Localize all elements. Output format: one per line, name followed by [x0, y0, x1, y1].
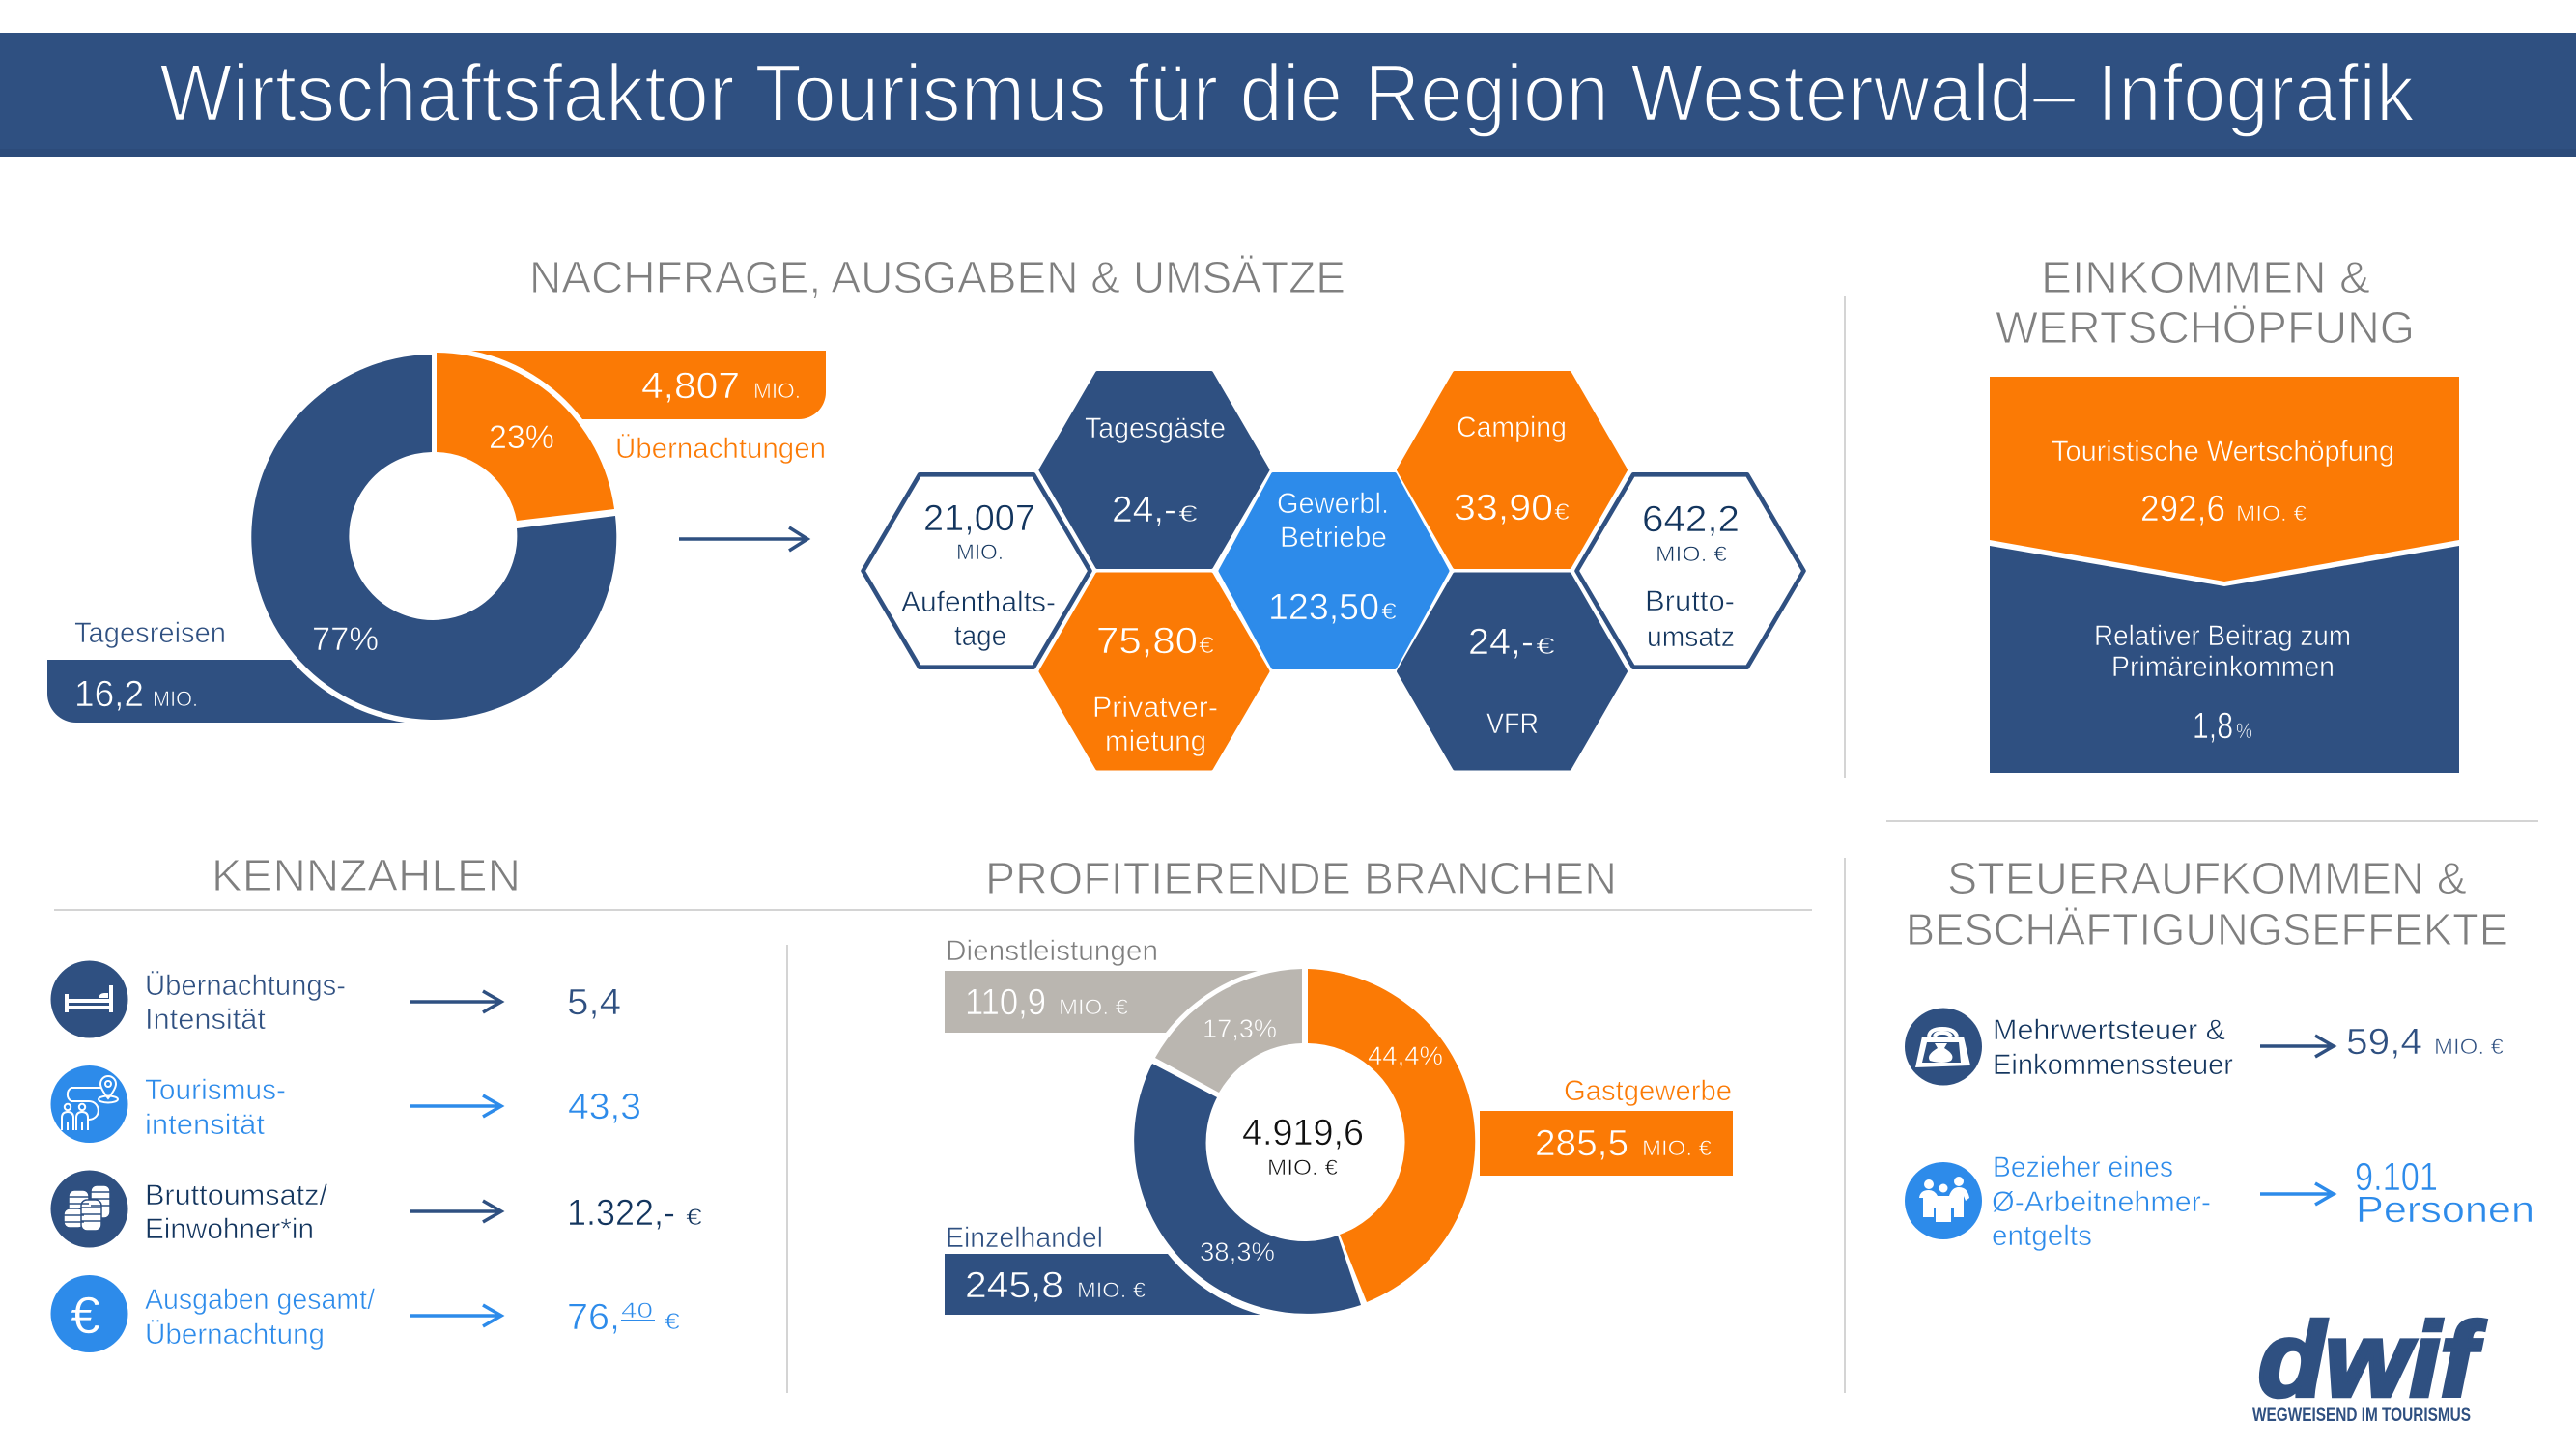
label band: Gastgewerbe — [1480, 1111, 1733, 1176]
icon: shopping bag with money sack — [1905, 1009, 1982, 1086]
label band: Übernachtungen — [471, 351, 826, 419]
block: Touristische Wertschöpfung: MIO. € — [2236, 501, 2307, 526]
row: Bezieher eines Arbeitnehmerentgelts: Ø-Arbeitnehmer- — [1992, 1186, 2211, 1218]
value: 285,5 Mio. Euro: MIO. € — [1642, 1136, 1712, 1160]
share: 44,4%: 44,4% — [1368, 1041, 1443, 1070]
title banner: Wirtschaftsfaktor Tourismus für die Region Westerwald– Infografik — [159, 47, 2416, 138]
heading: Steueraufkommen & Beschäftigungseffekte — [1906, 853, 2508, 954]
centre total: 4.919,6 Mio. Euro: MIO. € — [1267, 1155, 1338, 1179]
hexagon: VFR: € — [1536, 634, 1556, 660]
label: Tagesreisen: Tagesreisen — [74, 617, 226, 649]
logo: dwif: dwif — [2258, 1301, 2486, 1419]
row: Bruttoumsatz je Einwohner: Bruttoumsatz/ — [145, 1179, 328, 1211]
row: Bezieher eines Arbeitnehmerentgelts — [1905, 1151, 2534, 1252]
row: Bezieher eines Arbeitnehmerentgelts: Personen — [2356, 1190, 2534, 1231]
icon: euro — [50, 1275, 127, 1352]
segment: Dienstleistungen 17,3% — [1155, 969, 1302, 1093]
value: 285,5 Mio. Euro: 285,5 — [1535, 1123, 1628, 1164]
value: 4,807 Mio.: MIO. — [753, 379, 801, 403]
value: 4,807 Mio.: 4,807 — [641, 366, 740, 407]
hexagon: Privatvermietung — [1041, 574, 1267, 769]
hexagon: Aufenthaltstage — [863, 474, 1090, 668]
value: 245,8 Mio. Euro: MIO. € — [1077, 1278, 1146, 1302]
hexagon: VFR — [1399, 574, 1626, 769]
row: Ausgaben gesamt je Übernachtung — [50, 1275, 681, 1352]
hexagon: Privatvermietung: € — [1199, 633, 1215, 659]
hexagon: Gewerbliche Betriebe — [1221, 474, 1447, 668]
heading: Einkommen & Wertschöpfung: EINKOMMEN & — [2041, 252, 2370, 302]
hexagon: Bruttoumsatz — [1576, 474, 1804, 668]
hexagon: Gewerbliche Betriebe: Betriebe — [1280, 522, 1387, 554]
block: Relativer Beitrag: % — [2236, 719, 2252, 743]
icon: people and map pin — [50, 1065, 127, 1143]
block: Relativer Beitrag: 1,8 — [2193, 706, 2233, 747]
row: Mehrwertsteuer und Einkommenssteuer: Mehrwertsteuer & — [1993, 1014, 2225, 1046]
row: Bruttoumsatz je Einwohner: 1.322,- — [567, 1193, 675, 1234]
hexagon: Gewerbliche Betriebe: 123,50 — [1268, 587, 1379, 628]
row: Ausgaben gesamt je Übernachtung: 40 — [621, 1298, 653, 1322]
icon: coin stacks — [50, 1171, 127, 1248]
heading: Nachfrage, Ausgaben & Umsätze: NACHFRAGE, AUSGABEN & UMSÄTZE — [529, 252, 1345, 302]
donut chart: Tagesreisen und Übernachtungen — [47, 351, 826, 723]
icon: family — [1905, 1162, 1982, 1239]
centre total: 4.919,6 Mio. Euro — [1242, 1113, 1364, 1179]
value: 16,2 Mio.: 16,2 — [74, 674, 144, 715]
block: Touristische Wertschöpfung — [1990, 377, 2459, 582]
value: 245,8 Mio. Euro — [965, 1265, 1146, 1306]
value: 110,9 Mio. Euro — [965, 982, 1128, 1023]
value: 4,807 Mio. — [641, 366, 801, 407]
heading: Einkommen & Wertschöpfung: WERTSCHÖPFUNG — [1996, 302, 2415, 353]
hexagon: Aufenthaltstage: MIO. — [956, 540, 1004, 564]
hexagon: Bruttoumsatz: MIO. € — [1656, 542, 1727, 566]
hexagon: Tagesgäste: Tagesgäste — [1085, 412, 1226, 444]
row: Ausgaben gesamt je Übernachtung: 76, — [567, 1297, 620, 1338]
row: Übernachtungsintensität: Übernachtungs- — [145, 970, 346, 1002]
share: 77%: 77% — [312, 621, 379, 658]
hexagon: Gewerbliche Betriebe: € — [1381, 599, 1398, 625]
hexagon: VFR: VFR — [1486, 708, 1539, 740]
panel: Kennzahlen — [50, 960, 703, 1352]
label band: Dienstleistungen — [945, 971, 1258, 1033]
icon: bed — [50, 960, 127, 1037]
segment: Tagesreisen 77% — [251, 355, 616, 720]
hexagon cluster: Ausgaben und Umsätze — [863, 373, 1804, 769]
share: 17,3%: 17,3% — [1203, 1014, 1277, 1043]
hexagon: Bruttoumsatz: Brutto- — [1645, 585, 1735, 617]
arrow: donut to hexagons — [679, 527, 807, 551]
heading: Profitierende Branchen: PROFITIERENDE BRANCHEN — [985, 853, 1617, 903]
block: Relativer Beitrag: Relativer Beitrag zum — [2094, 620, 2351, 652]
row: Bezieher eines Arbeitnehmerentgelts: entgelts — [1992, 1220, 2092, 1252]
row: Tourismusintensität: 43,3 — [568, 1087, 641, 1127]
row: Bruttoumsatz je Einwohner — [50, 1171, 703, 1248]
segment: Übernachtungen 23% — [437, 353, 614, 521]
hexagon: Privatvermietung: mietung — [1105, 725, 1206, 757]
label band: Einzelhandel — [945, 1254, 1260, 1315]
hexagon: Camping: 33,90 — [1454, 488, 1553, 528]
block: Relativer Beitrag: Primäreinkommen — [2111, 651, 2335, 683]
value: 110,9 Mio. Euro: 110,9 — [965, 982, 1046, 1023]
value: 110,9 Mio. Euro: MIO. € — [1059, 995, 1128, 1019]
share: 23%: 23% — [489, 419, 554, 456]
hexagon: Tagesgäste: 24,- — [1112, 490, 1176, 530]
panel: Steueraufkommen und Beschäftigung — [1905, 1009, 2534, 1252]
label: Einzelhandel: Einzelhandel — [946, 1222, 1103, 1254]
heading: Steueraufkommen & Beschäftigungseffekte: BESCHÄFTIGUNGSEFFEKTE — [1906, 904, 2508, 954]
label: Gastgewerbe: Gastgewerbe — [1564, 1075, 1732, 1107]
hexagon: VFR: 24,- — [1468, 622, 1534, 663]
logo: dwif: WEGWEISEND IM TOURISMUS — [2252, 1406, 2471, 1426]
hexagon: Privatvermietung: 75,80 — [1096, 621, 1198, 662]
value: 16,2 Mio.: MIO. — [153, 687, 198, 711]
row: Ausgaben gesamt je Übernachtung: Ausgaben gesamt/ — [145, 1284, 376, 1316]
hexagon: Aufenthaltstage: Aufenthalts- — [901, 586, 1056, 618]
hexagon: Tagesgäste: € — [1178, 501, 1199, 527]
row: Tourismusintensität: intensität — [145, 1109, 266, 1141]
segment: Einzelhandel 38,3% — [1134, 1064, 1361, 1314]
hexagon: Bruttoumsatz: 642,2 — [1642, 499, 1740, 540]
panel: Einkommen und Wertschöpfung — [1990, 377, 2459, 773]
segment: Gastgewerbe 44,4% — [1308, 969, 1475, 1302]
row: Tourismusintensität: Tourismus- — [145, 1074, 286, 1106]
label: Dienstleistungen: Dienstleistungen — [946, 935, 1158, 967]
label: Übernachtungen: Übernachtungen — [615, 433, 826, 465]
row: Übernachtungsintensität: 5,4 — [567, 982, 621, 1023]
row: Übernachtungsintensität — [50, 960, 621, 1037]
hexagon: Tagesgäste — [1041, 373, 1267, 567]
row: Mehrwertsteuer und Einkommenssteuer: Einkommenssteuer — [1993, 1049, 2233, 1081]
row: Ausgaben gesamt je Übernachtung: Übernachtung — [145, 1319, 325, 1350]
row: Mehrwertsteuer und Einkommenssteuer: 59,4 — [2346, 1022, 2422, 1063]
hexagon: Privatvermietung: Privatver- — [1092, 692, 1218, 724]
row: Bezieher eines Arbeitnehmerentgelts: 9.101 — [2355, 1154, 2438, 1199]
value: 245,8 Mio. Euro: 245,8 — [965, 1265, 1063, 1306]
row: Mehrwertsteuer und Einkommenssteuer — [1905, 1009, 2504, 1086]
row: Tourismusintensität — [50, 1065, 641, 1143]
centre total: 4.919,6 Mio. Euro: 4.919,6 — [1242, 1113, 1364, 1153]
value: 16,2 Mio. — [74, 674, 198, 715]
hexagon: Aufenthaltstage: 21,007 — [923, 498, 1035, 539]
hexagon: Bruttoumsatz: umsatz — [1647, 621, 1735, 653]
row: Übernachtungsintensität: Intensität — [145, 1004, 267, 1036]
hexagon: Aufenthaltstage: tage — [954, 620, 1006, 652]
share: 38,3%: 38,3% — [1200, 1237, 1275, 1266]
value: 285,5 Mio. Euro — [1535, 1123, 1712, 1164]
block: Touristische Wertschöpfung: Touristische Wertschöpfung — [2052, 436, 2394, 468]
heading: Kennzahlen: KENNZAHLEN — [212, 850, 521, 900]
hexagon: Camping: € — [1554, 499, 1571, 526]
block: Relativer Beitrag — [1990, 546, 2459, 773]
row: Bruttoumsatz je Einwohner: € — [686, 1205, 703, 1231]
heading: Einkommen & Wertschöpfung — [1996, 252, 2415, 353]
heading: Steueraufkommen & Beschäftigungseffekte: STEUERAUFKOMMEN & — [1947, 853, 2467, 903]
row: Bruttoumsatz je Einwohner: Einwohner*in — [145, 1213, 314, 1245]
row: Mehrwertsteuer und Einkommenssteuer: MIO. € — [2434, 1035, 2504, 1059]
donut chart: Profitierende Branchen — [945, 935, 1733, 1315]
title banner — [0, 33, 2576, 157]
label band: Tagesreisen — [47, 660, 405, 723]
block: Touristische Wertschöpfung: 292,6 — [2140, 489, 2225, 529]
row: Ausgaben gesamt je Übernachtung: € — [665, 1309, 681, 1335]
hexagon: Camping — [1399, 373, 1626, 567]
hexagon: Gewerbliche Betriebe: Gewerbl. — [1277, 488, 1389, 520]
icon: euro: € — [71, 1287, 100, 1345]
row: Bezieher eines Arbeitnehmerentgelts: Bezieher eines — [1993, 1151, 2173, 1183]
hexagon: Camping: Camping — [1457, 412, 1567, 443]
